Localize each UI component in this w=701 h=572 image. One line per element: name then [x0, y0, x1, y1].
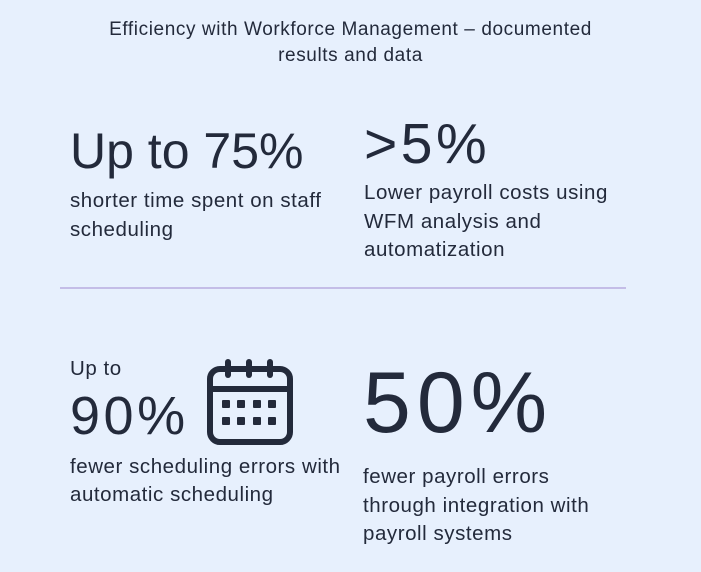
stat: 50%: payroll systems — [363, 522, 513, 545]
stat: 50% — [363, 355, 589, 545]
stat: 90%: Up to — [70, 357, 122, 380]
stat: >5% — [364, 112, 608, 261]
stat: 50%: through integration with — [363, 494, 589, 516]
stat: 90% — [70, 357, 341, 506]
title: results and data — [278, 45, 423, 66]
stat: >5%: WFM analysis and — [364, 210, 541, 232]
stat: 75% — [70, 123, 321, 240]
icon: calendar — [207, 359, 293, 445]
stat: 50%: 50% — [363, 355, 553, 451]
stat: 90%: automatic scheduling — [70, 483, 274, 506]
stat: >5%: >5% — [364, 112, 490, 176]
stat: 90%: fewer scheduling errors with — [70, 454, 341, 478]
title — [109, 19, 592, 66]
stat: 75%: shorter time spent on staff — [70, 189, 321, 212]
stat: 50%: fewer payroll errors — [363, 465, 549, 488]
title: Efficiency with Workforce Management – documented — [109, 19, 592, 40]
stat: 75%: scheduling — [70, 218, 174, 240]
divider — [60, 287, 626, 289]
stat: >5%: Lower payroll costs using — [364, 181, 608, 204]
stat: 90%: 90% — [70, 386, 189, 446]
stat: >5%: automatization — [364, 238, 505, 261]
stat: 75%: Up to 75% — [70, 123, 303, 179]
